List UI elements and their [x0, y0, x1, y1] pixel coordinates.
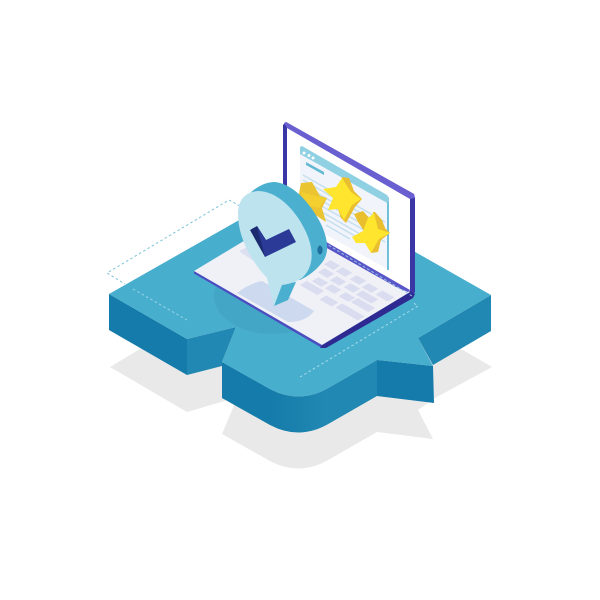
- window title bar: [306, 162, 324, 175]
- platform side: centre curve: [222, 360, 377, 433]
- screen frame: [283, 122, 415, 299]
- speech bubble: [238, 182, 327, 306]
- bubble tail side: [274, 282, 296, 306]
- base edge right: [320, 292, 415, 348]
- screen top edge: [284, 122, 415, 199]
- laptop base: [194, 218, 415, 348]
- window right edge: [387, 202, 389, 270]
- hinge: [325, 241, 410, 292]
- base edge left: [194, 271, 322, 348]
- review window: [300, 146, 389, 270]
- platform: [109, 186, 491, 433]
- laptop: [194, 122, 415, 348]
- bubble shadow on keyboard: [237, 281, 314, 322]
- bubble rivet: [317, 246, 323, 254]
- dashed outline on platform: [107, 200, 418, 377]
- small shadow patch: [239, 246, 262, 262]
- star middle: [323, 177, 362, 223]
- base top: [194, 218, 410, 345]
- bubble back: [250, 182, 327, 280]
- platform side: right notch: [377, 360, 434, 403]
- keyboard dashed line: [320, 240, 412, 296]
- bubble face: [238, 191, 312, 306]
- window text lines: [303, 175, 385, 242]
- window body: [300, 147, 389, 270]
- platform side: left: [109, 294, 187, 375]
- ground shadow: [110, 300, 492, 469]
- platform side: left notch: [187, 327, 236, 375]
- star right: [352, 211, 390, 253]
- laptop screen: [283, 122, 415, 299]
- keyboard: [300, 260, 395, 320]
- shadow under laptop on platform: [214, 258, 330, 334]
- platform side: right: [418, 295, 491, 365]
- star left: [296, 182, 327, 222]
- screen display: [287, 128, 410, 291]
- window header: [300, 146, 389, 204]
- platform top: [109, 186, 491, 397]
- check mark: [250, 226, 296, 257]
- window dots: [302, 152, 314, 160]
- stars: [296, 177, 390, 253]
